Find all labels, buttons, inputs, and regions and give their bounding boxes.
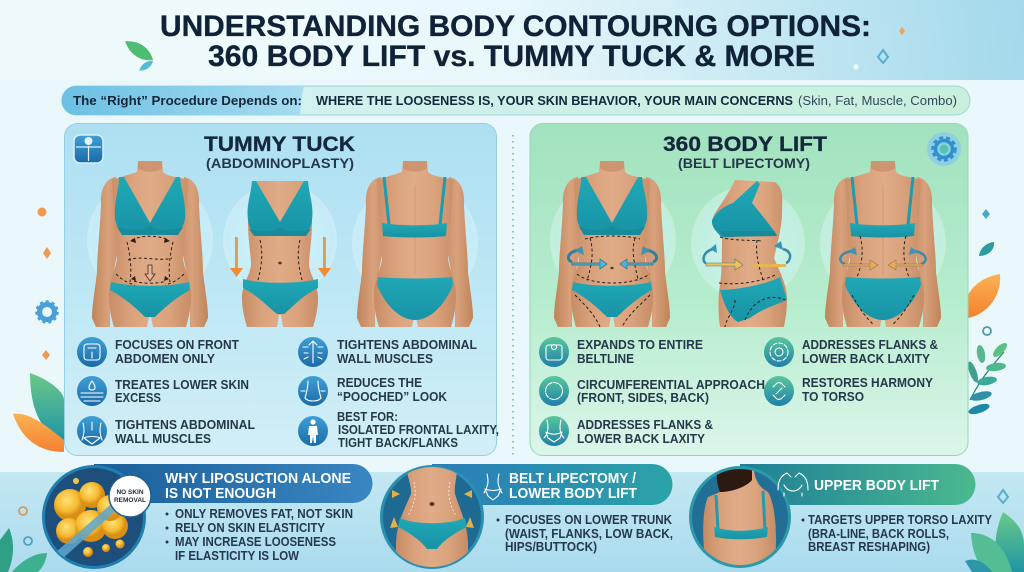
panel: tummy tuck xyxy=(64,124,499,456)
heading: tummy tuck: TUMMY TUCK xyxy=(204,133,355,156)
bullet: reduces pooched look xyxy=(298,376,447,406)
figure: front view with markings xyxy=(87,161,213,327)
procedure depends banner: (Skin, Fat, Muscle, Combo) xyxy=(798,93,957,108)
bullet: tightens abdominal wall muscles left: TIGHTENS ABDOMINAL xyxy=(115,418,255,432)
bullets xyxy=(496,513,673,554)
bullet: restores harmony xyxy=(764,376,934,406)
bullet: addresses flanks left: ADDRESSES FLANKS & xyxy=(577,418,713,432)
header pill xyxy=(740,464,976,505)
bullet: addresses flanks left xyxy=(539,416,713,446)
bullet: expands to entire beltline: BELTLINE xyxy=(577,352,634,366)
decorative sparkles top right xyxy=(854,27,905,70)
bullet: focuses on front abdomen xyxy=(77,337,239,367)
bullet: best for: BEST FOR: xyxy=(337,410,398,424)
heading xyxy=(509,471,637,502)
subheading: belt lipectomy: (BELT LIPECTOMY) xyxy=(678,155,810,171)
title: 360 BODY LIFT vs. TUMMY TUCK & MORE xyxy=(208,40,815,73)
bullet: treats lower skin excess: EXCESS xyxy=(115,391,161,405)
icon: gear xyxy=(927,132,961,166)
bullets xyxy=(802,513,993,554)
bottom right decorations xyxy=(965,490,1024,572)
figure: back view with rotation arrows xyxy=(820,161,946,327)
badge: no skin removal xyxy=(109,475,151,517)
header pill xyxy=(432,464,672,505)
heading: UPPER BODY LIFT xyxy=(814,478,939,494)
bullet: reduces pooched look: “POOCHED” LOOK xyxy=(337,390,447,404)
bullet: restores harmony: RESTORES HARMONY xyxy=(802,376,934,390)
bullet: reduces pooched look: REDUCES THE xyxy=(337,376,422,390)
bullet: addresses flanks left: LOWER BACK LAXITY xyxy=(577,432,706,446)
procedure depends banner: WHERE THE LOOSENESS IS, YOUR SKIN BEHAVIOR, YOUR MAIN CONCERNS xyxy=(316,93,793,108)
title: UNDERSTANDING BODY CONTOURNG OPTIONS: xyxy=(160,10,871,43)
figure: back view xyxy=(352,161,478,327)
bullet: best for: ISOLATED FRONTAL LAXITY, xyxy=(338,423,499,437)
bullets: BREAST RESHAPING) xyxy=(808,540,930,554)
title xyxy=(160,10,871,73)
right decorations xyxy=(966,209,1009,416)
bullet list: 360 body lift xyxy=(539,337,938,446)
bullet: addresses flanks right: LOWER BACK LAXITY xyxy=(802,352,931,366)
badge: no skin removal: REMOVAL xyxy=(114,497,146,504)
bullets: ONLY REMOVES FAT, NOT SKIN xyxy=(175,507,353,521)
badge: no skin removal: NO SKIN xyxy=(116,489,144,496)
card: why liposuction alone xyxy=(42,464,372,569)
dotted divider xyxy=(512,135,514,455)
heading: BELT LIPECTOMY / xyxy=(509,471,636,487)
bullet: tightens abdominal wall muscles right: WALL MUSCLES xyxy=(337,352,433,366)
panel: 360 body lift xyxy=(530,124,968,456)
procedure depends banner xyxy=(62,86,970,115)
card: belt lipectomy xyxy=(380,464,673,570)
bullet: expands to entire beltline xyxy=(539,337,703,367)
bullet: tightens abdominal wall muscles right: TIGHTENS ABDOMINAL xyxy=(337,338,477,352)
bullets: FOCUSES ON LOWER TRUNK xyxy=(505,513,672,527)
bullet: tightens abdominal wall muscles left xyxy=(77,416,255,446)
figure: front view with rotation arrows xyxy=(550,161,676,327)
illustration: lower torso xyxy=(380,465,484,570)
heading: 360 body lift: 360 BODY LIFT xyxy=(663,133,827,156)
bullet: treats lower skin excess: TREATES LOWER SKIN xyxy=(115,378,249,392)
left decorations xyxy=(13,208,64,452)
illustration: upper back xyxy=(689,466,791,570)
bullets: RELY ON SKIN ELASTICITY xyxy=(175,521,326,535)
bullet: addresses flanks right xyxy=(764,337,938,367)
icon: torso xyxy=(778,473,808,496)
bullet: restores harmony: TO TORSO xyxy=(802,390,864,404)
figure: side view with rotation arrows xyxy=(691,180,805,327)
bullets xyxy=(166,507,353,563)
icon: scale xyxy=(74,135,103,163)
bottom left decorations xyxy=(0,507,47,572)
heading xyxy=(165,471,351,502)
header pill xyxy=(94,464,372,503)
icon: waist xyxy=(484,474,502,500)
bullet: focuses on front abdomen: FOCUSES ON FRONT xyxy=(115,338,239,352)
bullet: expands to entire beltline: EXPANDS TO ENTIRE xyxy=(577,338,703,352)
bullet: focuses on front abdomen: ABDOMEN ONLY xyxy=(115,352,216,366)
illustration: fat cells xyxy=(42,465,146,569)
bullets: IF ELASTICITY IS LOW xyxy=(175,549,299,563)
bullets: HIPS/BUTTOCK) xyxy=(505,540,597,554)
icon: top leaf xyxy=(122,36,157,73)
bullet: treats lower skin excess xyxy=(77,376,249,406)
heading: LOWER BODY LIFT xyxy=(509,486,637,502)
bullets: (BRA-LINE, BACK ROLLS, xyxy=(808,527,949,541)
bullet: best for: TIGHT BACK/FLANKS xyxy=(338,436,458,450)
bullets: TARGETS UPPER TORSO LAXITY xyxy=(808,513,993,527)
heading: IS NOT ENOUGH xyxy=(165,486,276,502)
card: upper body lift xyxy=(689,464,993,570)
bullet: tightens abdominal wall muscles left: WALL MUSCLES xyxy=(115,432,211,446)
bullets: (WAIST, FLANKS, LOW BACK, xyxy=(505,527,673,541)
bullet: tightens abdominal wall muscles right xyxy=(298,337,477,367)
bullet: addresses flanks right: ADDRESSES FLANKS & xyxy=(802,338,938,352)
figure: narrow front view with arrows xyxy=(223,181,337,327)
bullet: circumferential approach xyxy=(539,376,765,406)
bullet list: tummy tuck xyxy=(77,337,499,450)
heading: WHY LIPOSUCTION ALONE xyxy=(165,471,351,487)
procedure depends banner: The “Right” Procedure Depends on: xyxy=(73,93,302,108)
bullet: circumferential approach: CIRCUMFERENTIAL APPROACH xyxy=(577,378,765,392)
bullet: best for xyxy=(298,410,499,450)
subheading: abdominoplasty: (ABDOMINOPLASTY) xyxy=(206,155,354,171)
bullet: circumferential approach: (FRONT, SIDES, BACK) xyxy=(577,391,709,405)
bullets: MAY INCREASE LOOSENESS xyxy=(175,535,336,549)
